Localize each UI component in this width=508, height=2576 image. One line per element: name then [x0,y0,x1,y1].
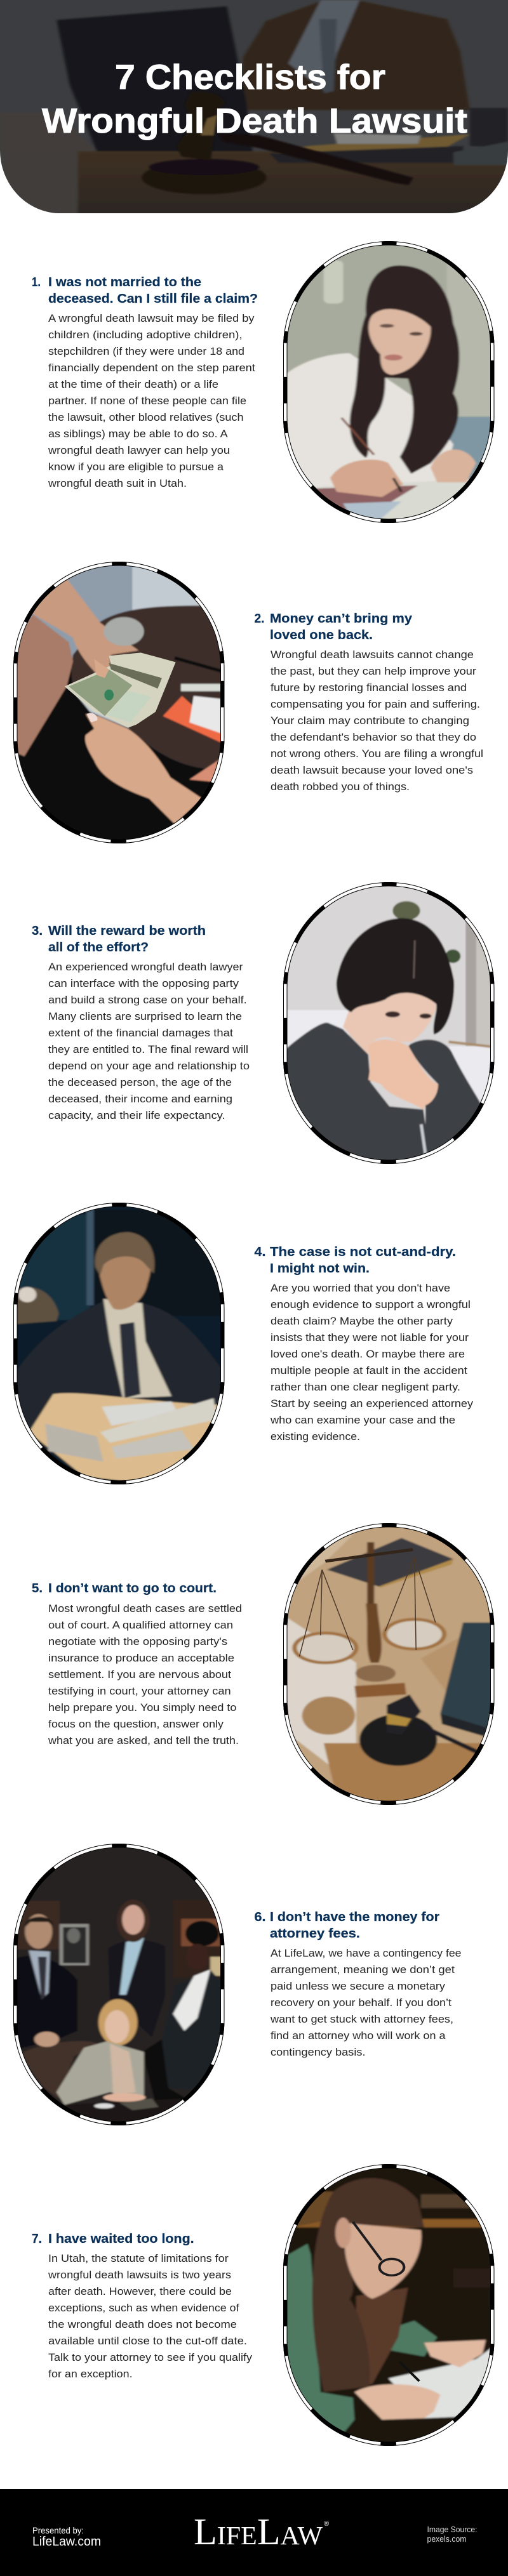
heading 2: 2. [254,611,264,626]
body text 7: for an exception. [48,2368,133,2380]
body text 6: paid unless we secure a monetary [271,1981,446,1992]
body text 2: death lawsuit because your loved one's [271,765,473,776]
heading 3 [32,923,206,954]
body text 3: An experienced wrongful death lawyer [48,961,243,973]
body text 3: deceased, their income and earning [48,1093,232,1105]
body text 4: who can examine your case and the [270,1415,455,1426]
photo 6: team of four attorneys in oval frame [13,1844,225,2125]
body text 1: children (including adoptive children), [48,329,243,341]
photo 5: scales of justice and gavel in oval frame [283,1523,494,1805]
heading 1: deceased. Can I still file a claim? [48,291,258,306]
body text 1: wrongful death lawyer can help you [48,445,230,456]
body text 2: the defendant's behavior so that they do [271,732,476,743]
heading 6: 6. [254,1910,265,1924]
heading 2: Money can’t bring my [270,611,413,626]
body text 7: In Utah, the statute of limitations for [48,2253,229,2264]
body text 3: they are entitled to. The final reward will [48,1044,248,1055]
heading 6: attorney fees. [270,1926,360,1941]
body text 5: Most wrongful death cases are settled [48,1603,242,1615]
body text 3: capacity, and their life expectancy. [48,1110,225,1121]
presented by credit: Presented by: [32,2525,84,2535]
title: Wrongful Death Lawsuit [42,101,467,140]
body text 2: not wrong others. You are filing a wrongful [271,748,483,760]
body text 4 [270,1283,474,1443]
body text 4: loved one's death. Or maybe there are [271,1349,465,1360]
body text 6: recovery on your behalf. If you don’t [271,1997,451,2009]
body text 1: at the time of their death) or a life [48,379,218,390]
panel 7: waited too long [32,2158,502,2450]
body text 1: financially dependent on the step parent [48,362,255,374]
heading 3: all of the effort? [48,940,149,954]
body text 4: Are you worried that you don't have [271,1283,450,1294]
body text 6: want to get stuck with attorney fees, [270,2014,453,2025]
body text 5: insurance to produce an acceptable [48,1653,234,1664]
body text 5: settlement. If you are nervous about [48,1669,231,1681]
header banner [0,0,508,215]
photo 7: woman with glasses signing document in oval frame [275,2158,502,2450]
body text 3: depend on your age and relationship to [48,1060,250,1072]
image source credit: Image Source: [427,2525,478,2534]
panel 2: money [10,558,483,852]
body text 5: negotiate with the opposing party's [48,1636,227,1648]
body text 6: At LifeLaw, we have a contingency fee [271,1948,461,1959]
body text 4: death claim? Maybe the other party [271,1316,453,1327]
panel 6: attorney fees [0,1839,462,2134]
photo 3: worried young woman in oval frame [279,879,500,1171]
body text 4: insists that they were not liable for your [271,1332,469,1344]
body text 1 [48,313,255,489]
body text 5: out of court. A qualified attorney can [48,1620,233,1631]
body text 5: what you are asked, and tell the truth. [48,1735,239,1747]
heading 4: I might not win. [270,1261,370,1276]
body text 1: wrongful death suit in Utah. [48,478,187,489]
body text 6 [270,1948,461,2058]
body text 5: help prepare you. You simply need to [48,1702,236,1714]
body text 4: Start by seeing an experienced attorney [271,1398,474,1410]
body text 7: the wrongful death does not become [48,2319,237,2330]
body text 7: exceptions, such as when evidence of [48,2302,239,2314]
body text 1: the lawsuit, other blood relatives (such [48,412,244,423]
title: 7 Checklists for [115,57,385,96]
presented by credit [32,2525,101,2549]
photo 1: woman writing in oval frame [278,237,499,533]
heading 6 [254,1910,439,1941]
body text 2: future by restoring financial losses and [271,682,467,694]
heading 6: I don’t have the money for [270,1910,439,1924]
body text 3: can interface with the opposing party [48,978,239,989]
body text 3 [48,961,250,1121]
panel 4: not cut and dry [0,1193,474,1493]
title [42,57,467,140]
body text 5: focus on the question, answer only [48,1719,224,1730]
heading 3: Will the reward be worth [48,923,206,938]
heading 7: 7. [32,2231,42,2246]
body text 5: testifying in court, your attorney can [48,1686,231,1697]
heading 5: 5. [32,1581,43,1595]
panel 5: court [32,1519,502,1811]
panel 3: reward [32,879,500,1171]
body text 4: rather than one clear negligent party. [271,1382,460,1393]
image source credit: pexels.com [427,2534,466,2544]
LifeLaw logo: LifeLaw [194,2511,323,2553]
body text 7: available until close to the cut-off date. [48,2335,247,2347]
photo 2: hands exchanging money in oval frame [10,558,230,852]
body text 2 [271,649,483,793]
body text 1: partner. If none of these people can file [48,395,246,407]
body text 2: compensating you for pain and suffering. [271,699,480,710]
body text 2: death robbed you of things. [271,781,410,793]
body text 2: Your claim may contribute to changing [271,715,469,727]
body text 7: after death. However, there could be [48,2286,232,2297]
heading 1 [32,275,258,306]
heading 5: I don’t want to go to court. [48,1581,217,1595]
heading 1: I was not married to the [48,275,201,289]
LifeLaw logo: ® [324,2520,329,2528]
heading 2: loved one back. [270,628,373,642]
heading 4: The case is not cut-and-dry. [270,1245,456,1259]
body text 7: Talk to your attorney to see if you qualify [48,2352,253,2363]
body text 7 [48,2253,253,2380]
body text 3: the deceased person, the age of the [48,1077,232,1088]
footer [0,2489,508,2576]
body text 1: A wrongful death lawsuit may be filed by [48,313,255,324]
body text 6: find an attorney who will work on a [271,2030,446,2042]
body text 4: multiple people at fault in the accident [271,1365,467,1377]
body text 6: arrangement, meaning we don’t get [271,1964,455,1976]
photo 4: man in suit reviewing papers in oval frame [13,1203,225,1484]
body text 3: Many clients are surprised to learn the [48,1011,242,1022]
heading 7: I have waited too long. [48,2231,194,2246]
presented by credit: LifeLaw.com [32,2535,101,2549]
heading 3: 3. [32,923,43,938]
body text 4: existing evidence. [271,1431,360,1443]
body text 3: extent of the financial damages that [48,1027,233,1039]
body text 1: stepchildren (if they were under 18 and [48,346,244,357]
heading 4: 4. [254,1245,265,1259]
header photo: gavel and lawyer [0,0,508,215]
body text 5 [48,1603,242,1747]
body text 2: Wrongful death lawsuits cannot change [271,649,474,661]
image source credit [427,2525,478,2544]
body text 7: wrongful death lawsuits is two years [48,2269,231,2281]
body text 2: the past, but they can help improve your [271,666,477,677]
heading 4 [254,1245,456,1276]
heading 2 [254,611,413,642]
body text 1: as siblings) may be able to do so. A [48,428,228,440]
body text 4: enough evidence to support a wrongful [271,1299,471,1311]
body text 3: and build a strong case on your behalf. [48,994,247,1006]
heading 1: 1. [32,275,41,289]
panel 1: not married [32,237,499,533]
body text 1: know if you are eligible to pursue a [48,461,224,473]
body text 6: contingency basis. [271,2047,366,2058]
